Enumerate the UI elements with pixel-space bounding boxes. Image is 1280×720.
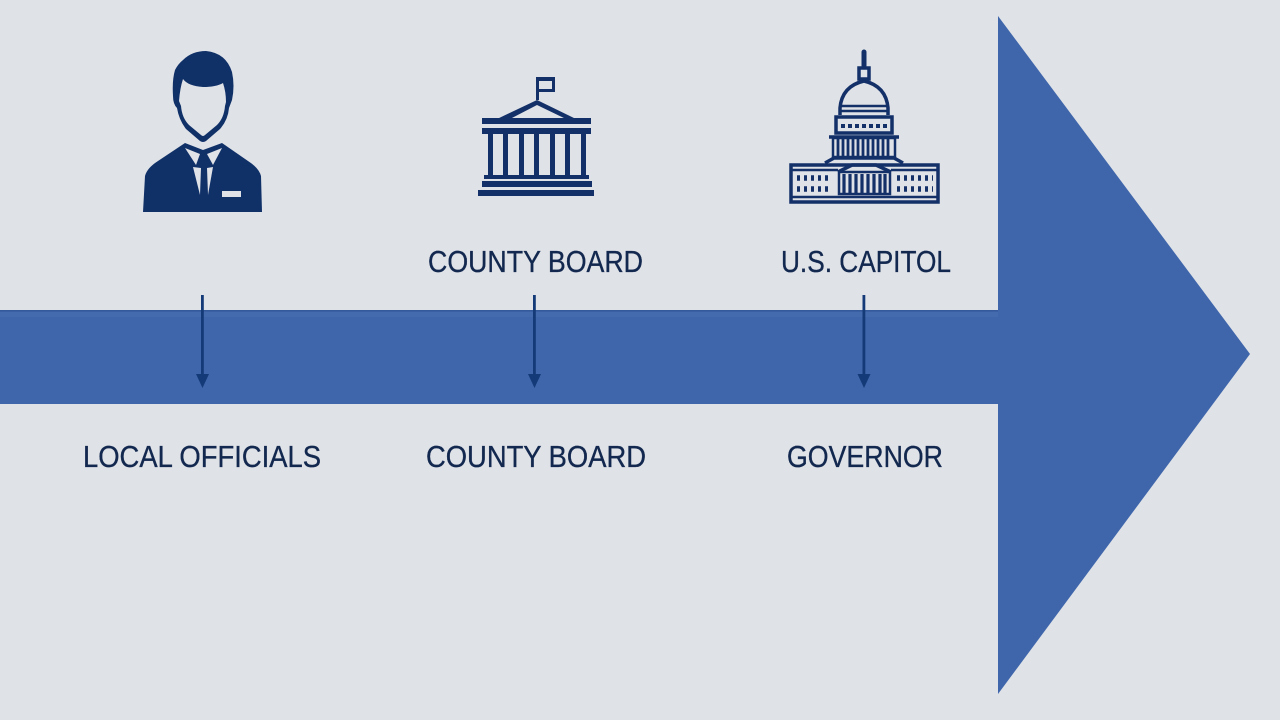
label: local officials: LOCAL OFFICIALS bbox=[83, 439, 321, 474]
arrow: governor bbox=[858, 295, 870, 388]
label: county board bottom: COUNTY BOARD bbox=[426, 439, 646, 474]
arrow: local officials bbox=[196, 295, 209, 388]
label: U.S. Capitol: U.S. CAPITOL bbox=[781, 244, 951, 279]
icon: official in suit bbox=[143, 51, 262, 212]
arrow: county board bbox=[528, 295, 541, 388]
icon: county courthouse with flag bbox=[478, 77, 594, 196]
icon: U.S. Capitol building bbox=[791, 52, 938, 202]
label: county board top: COUNTY BOARD bbox=[428, 244, 643, 279]
label: governor: GOVERNOR bbox=[787, 439, 943, 474]
